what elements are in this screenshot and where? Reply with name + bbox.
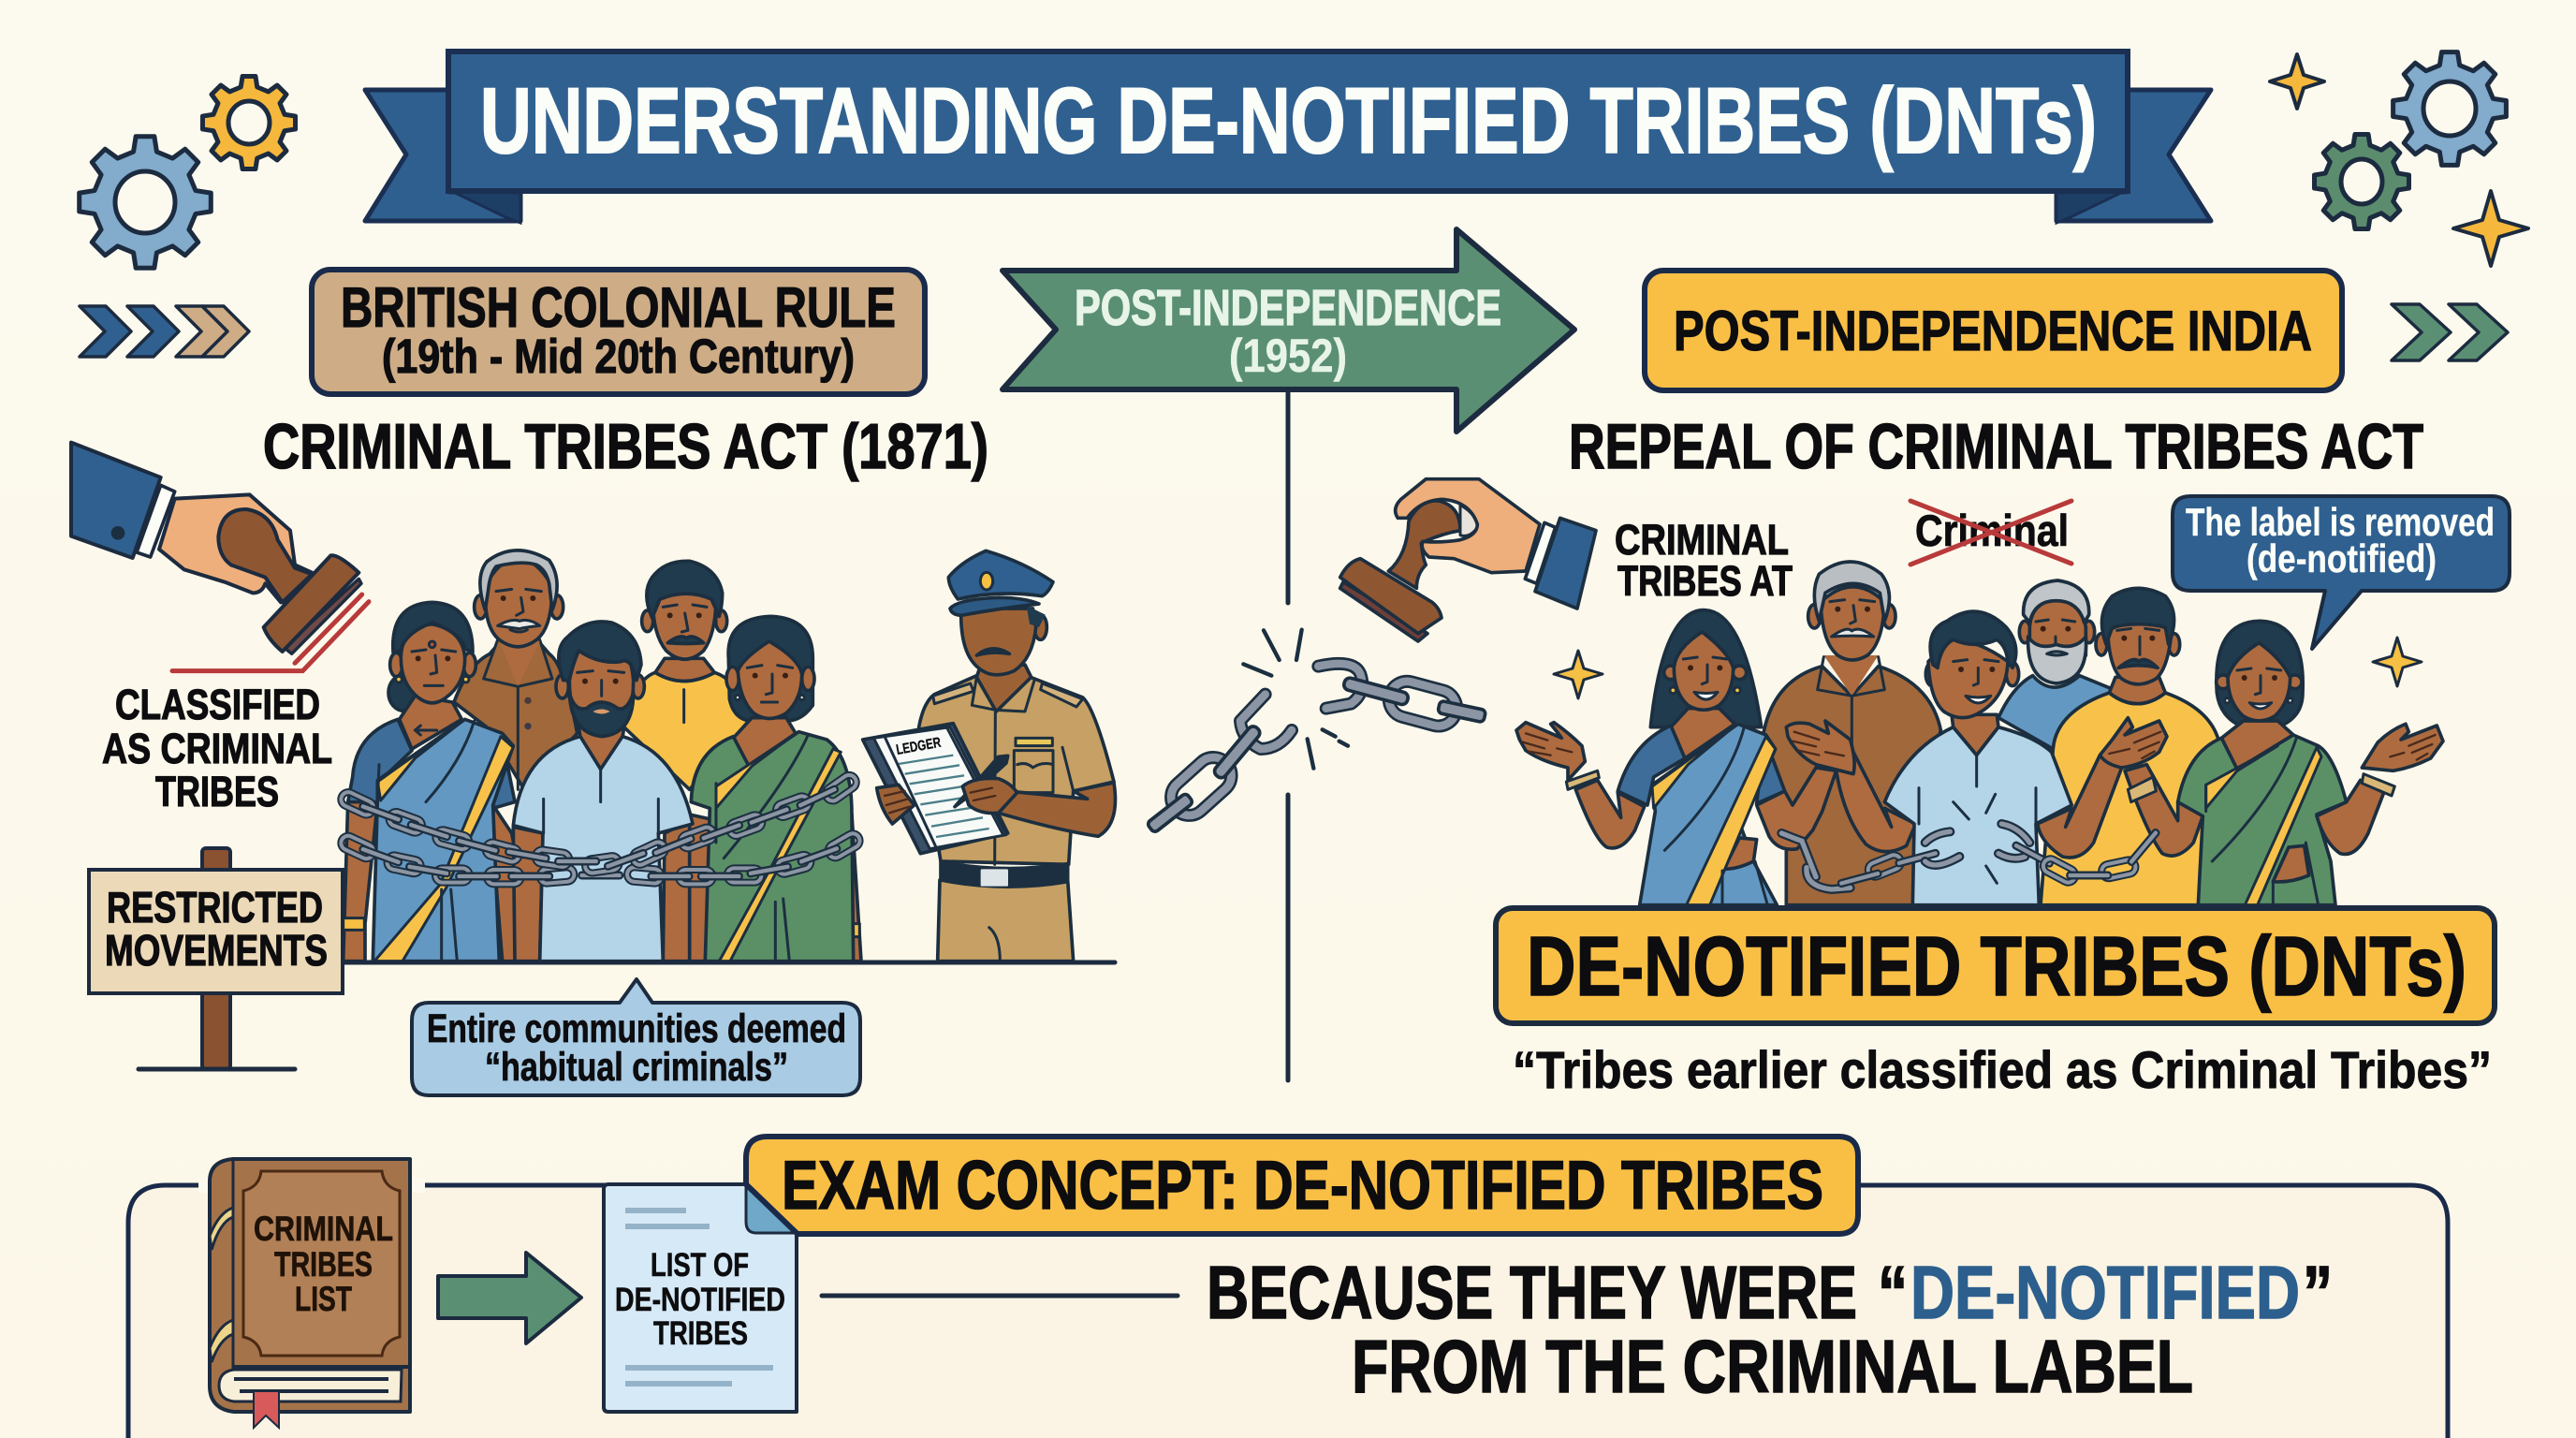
person: centre man in light blue — [1884, 611, 2071, 905]
explanation text: DE-NOTIFIED — [1910, 1251, 2300, 1334]
panel: British colonial rule heading — [312, 270, 925, 394]
panel: British colonial rule heading: BRITISH COLONIAL RULE — [341, 276, 896, 339]
connector line — [822, 1294, 1178, 1298]
banner left tail — [365, 90, 520, 223]
text: classified: TRIBES — [155, 768, 279, 815]
title text: UNDERSTANDING DE-NOTIFIED TRIBES (DNTs) — [480, 68, 2097, 172]
crossed-out label: Criminal: Criminal — [1915, 506, 2069, 555]
person: woman in blue sari — [1516, 610, 1837, 905]
icon: chevrons left — [80, 306, 249, 357]
explanation text: FROM THE CRIMINAL LABEL — [1352, 1325, 2193, 1408]
explanation text: ” — [2303, 1251, 2333, 1334]
chains binding the group — [339, 772, 862, 884]
icon: gears left — [80, 77, 296, 268]
arrow: post-independence 1952 — [1003, 229, 1574, 432]
panel: post-independence India heading — [1645, 271, 2342, 390]
panel body — [128, 1185, 2448, 1438]
crossed-out label: Criminal — [1910, 501, 2071, 565]
icon: sparkle stars top right — [2270, 54, 2528, 266]
broken wrist chains, right — [1998, 824, 2160, 885]
raised left arm and hand — [1516, 723, 1645, 848]
hand over brown shirt — [1786, 721, 1916, 852]
person: old bearded man — [1998, 580, 2114, 749]
icon: book — [210, 1159, 410, 1428]
person: man in yellow — [624, 561, 749, 789]
icon: sparkles right group — [1554, 638, 2422, 698]
arrow: post-independence 1952: (1952) — [1229, 330, 1347, 382]
icon: document list: DE-NOTIFIED — [615, 1282, 785, 1318]
exam concept label: EXAM CONCEPT: DE-NOTIFIED TRIBES — [782, 1148, 1823, 1224]
person: woman in blue sari — [344, 602, 536, 961]
icon: document list: TRIBES — [653, 1315, 748, 1352]
person: woman in green sari — [2125, 621, 2443, 905]
hand and cuff — [1396, 479, 1596, 609]
icon: restricted movements signpost — [89, 848, 343, 1069]
divider line — [1286, 391, 1290, 1080]
illustration: chained tribal group — [339, 550, 862, 961]
stamp — [1340, 501, 1460, 641]
person: woman in green sari — [688, 616, 861, 961]
ground line — [343, 961, 1115, 964]
callout: label removed: (de-notified) — [2247, 536, 2437, 580]
person: old man in brown — [1763, 562, 1940, 905]
broken wrist chains, left — [1781, 831, 1959, 889]
icon: chevrons right — [2392, 304, 2508, 360]
callout: label removed — [2173, 496, 2510, 649]
callout: habitual criminals: Entire communities deemed — [427, 1006, 846, 1051]
heading: Criminal Tribes Act: CRIMINAL TRIBES ACT (1871) — [263, 411, 988, 482]
icon: book: LIST — [295, 1280, 352, 1318]
callout: habitual criminals — [412, 979, 860, 1095]
broken chain right part — [1318, 664, 1486, 730]
explanation text: BECAUSE THEY WERE — [1207, 1251, 1857, 1334]
explanation text: “ — [1878, 1251, 1908, 1334]
callout: label removed: The label is removed — [2186, 500, 2495, 544]
icon: document list — [604, 1184, 797, 1412]
arrow: book to list — [438, 1253, 581, 1343]
title banner — [365, 51, 2211, 223]
exam concept label — [746, 1137, 1858, 1234]
panel: post-independence India heading: POST-INDEPENDENCE INDIA — [1674, 300, 2312, 362]
icon: hand with stamp, left — [71, 443, 369, 671]
icon: restricted movements signpost: MOVEMENTS — [105, 926, 328, 975]
person: grey-haired man — [454, 550, 578, 789]
illustration: freed tribal group, right half — [1884, 580, 2443, 905]
icon: restricted movements signpost: RESTRICTED — [107, 883, 323, 932]
text: criminal tribes at: CRIMINAL — [1615, 516, 1789, 564]
explanation text — [1207, 1251, 2333, 1408]
text: criminal tribes at — [1615, 516, 1793, 605]
broken chain left part — [1147, 695, 1292, 833]
text: classified — [102, 681, 332, 815]
person: man in yellow — [2041, 588, 2218, 905]
panel: exam concept — [128, 1137, 2448, 1438]
raised hand over yellow shirt — [2038, 718, 2167, 858]
text: classified: CLASSIFIED — [115, 681, 320, 728]
icon: gears right — [2315, 52, 2506, 228]
icon: hand with stamp and broken chain, centre — [1147, 479, 1596, 833]
break sparks — [1243, 630, 1348, 769]
text: criminal tribes at: TRIBES AT — [1617, 557, 1793, 605]
icon: book: CRIMINAL — [254, 1210, 393, 1248]
text: classified: AS CRIMINAL — [102, 725, 332, 772]
illustration: policeman with ledger: LEDGER — [895, 735, 943, 758]
person: bearded man in blue — [513, 622, 693, 961]
arrow: post-independence 1952: POST-INDEPENDENCE — [1075, 280, 1501, 336]
icon: document list: LIST OF — [651, 1247, 749, 1284]
panel: British colonial rule heading: (19th - Mid 20th Century) — [382, 330, 855, 383]
banner body — [448, 51, 2128, 191]
illustration: policeman with ledger — [863, 550, 1115, 961]
callout: habitual criminals: “habitual criminals” — [485, 1045, 788, 1090]
icon: book: TRIBES — [274, 1245, 373, 1284]
illustration: freed tribal group, left half — [1516, 562, 1940, 905]
raised arm and hand — [2128, 724, 2443, 854]
banner right tail — [2056, 90, 2211, 223]
